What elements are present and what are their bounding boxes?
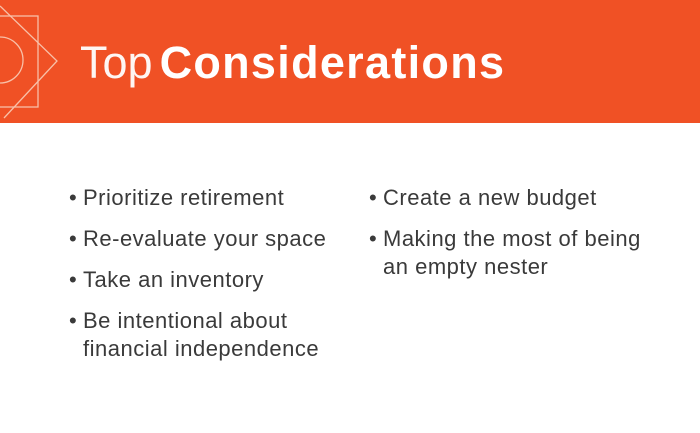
list: left column bbox=[70, 185, 326, 361]
list: left column: Take an inventory bbox=[83, 267, 264, 292]
header band bbox=[0, 0, 700, 123]
list: right column: an empty nester bbox=[383, 254, 548, 279]
list: left column: Prioritize retirement bbox=[83, 185, 284, 210]
list: left column: Re-evaluate your space bbox=[83, 226, 326, 251]
list: right column: Create a new budget bbox=[383, 185, 597, 210]
list: left column: Be intentional about bbox=[83, 308, 288, 333]
icon: geometric outline bbox=[0, 6, 58, 118]
list: right column: Making the most of being bbox=[383, 226, 641, 251]
list: right column bbox=[370, 185, 641, 279]
title: TopConsiderations bbox=[80, 37, 505, 88]
list: left column: financial independence bbox=[83, 336, 319, 361]
